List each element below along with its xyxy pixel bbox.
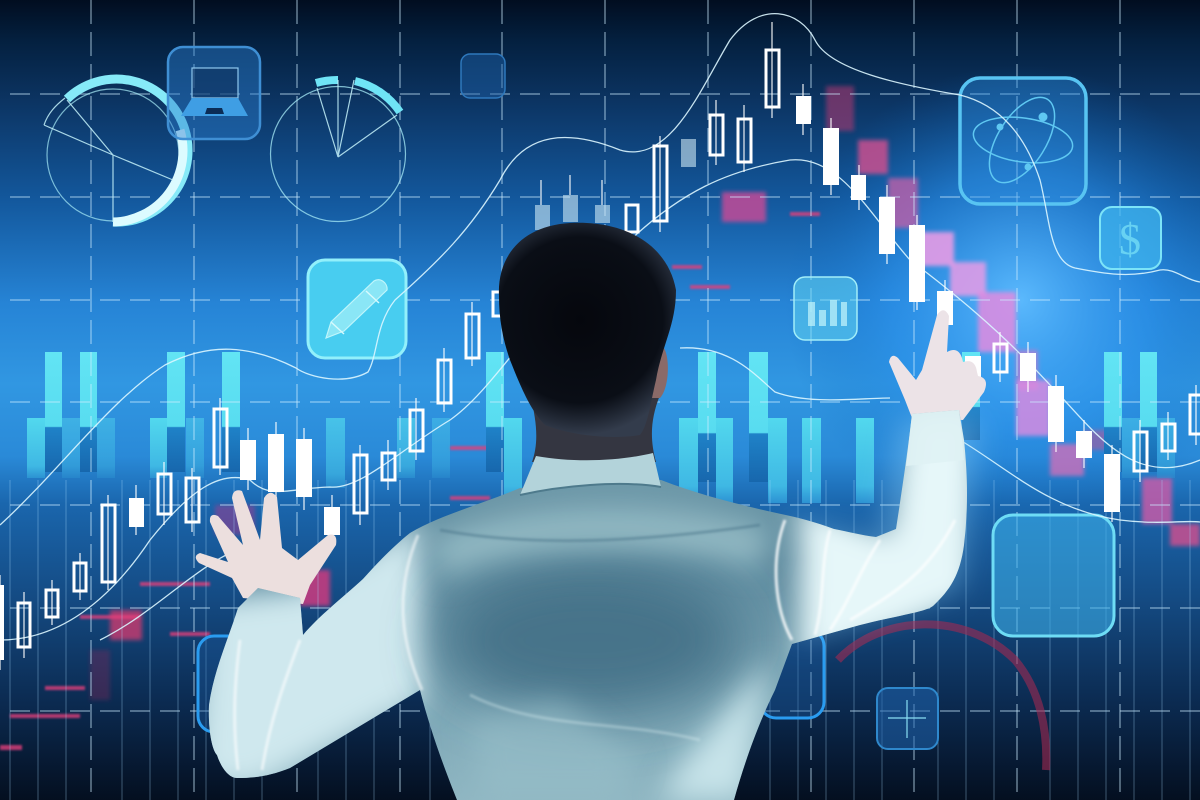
icon: atom bbox=[960, 78, 1086, 204]
pink dashes bbox=[0, 212, 820, 750]
man: neck bbox=[530, 395, 660, 462]
man: shirt body and sleeves bbox=[190, 400, 990, 800]
pink market heat blocks bbox=[90, 86, 1200, 700]
icon: dollar: $ bbox=[1119, 215, 1141, 264]
icon: pencil bbox=[308, 260, 406, 358]
icon: large blank tile bbox=[993, 515, 1114, 636]
bar chart: cyan background bars bbox=[27, 352, 1175, 503]
icon: dollar bbox=[1100, 207, 1161, 269]
icon: small lower tile bbox=[877, 688, 938, 749]
man: left hand bbox=[196, 490, 336, 604]
man: back shadow bbox=[440, 565, 740, 715]
man: collar bbox=[520, 453, 661, 495]
pie chart: large ring bbox=[44, 79, 188, 222]
icon: mini bar chart bbox=[794, 277, 857, 340]
icon: small blank tile bbox=[461, 54, 505, 98]
icon: laptop bbox=[168, 47, 260, 139]
man: cuff highlight bbox=[906, 410, 964, 466]
man: collar fold bbox=[520, 484, 661, 495]
man: hair bbox=[499, 223, 676, 437]
man: left sleeve lighting bbox=[195, 520, 425, 790]
man: lower back light bbox=[660, 660, 770, 800]
man: upper back light bbox=[430, 507, 770, 580]
man: right sleeve lighting bbox=[800, 405, 980, 670]
man: ear bbox=[645, 344, 668, 398]
icon: partly hidden tiles behind arms bbox=[198, 630, 824, 732]
man: arm glow bbox=[790, 420, 980, 640]
man: right hand bbox=[889, 310, 986, 420]
pie chart: small radar bbox=[270, 80, 406, 222]
man bbox=[190, 223, 990, 800]
dark red gauge ring bbox=[838, 624, 1046, 770]
man: shirt folds bbox=[235, 520, 955, 770]
trend lines bbox=[0, 14, 1200, 640]
